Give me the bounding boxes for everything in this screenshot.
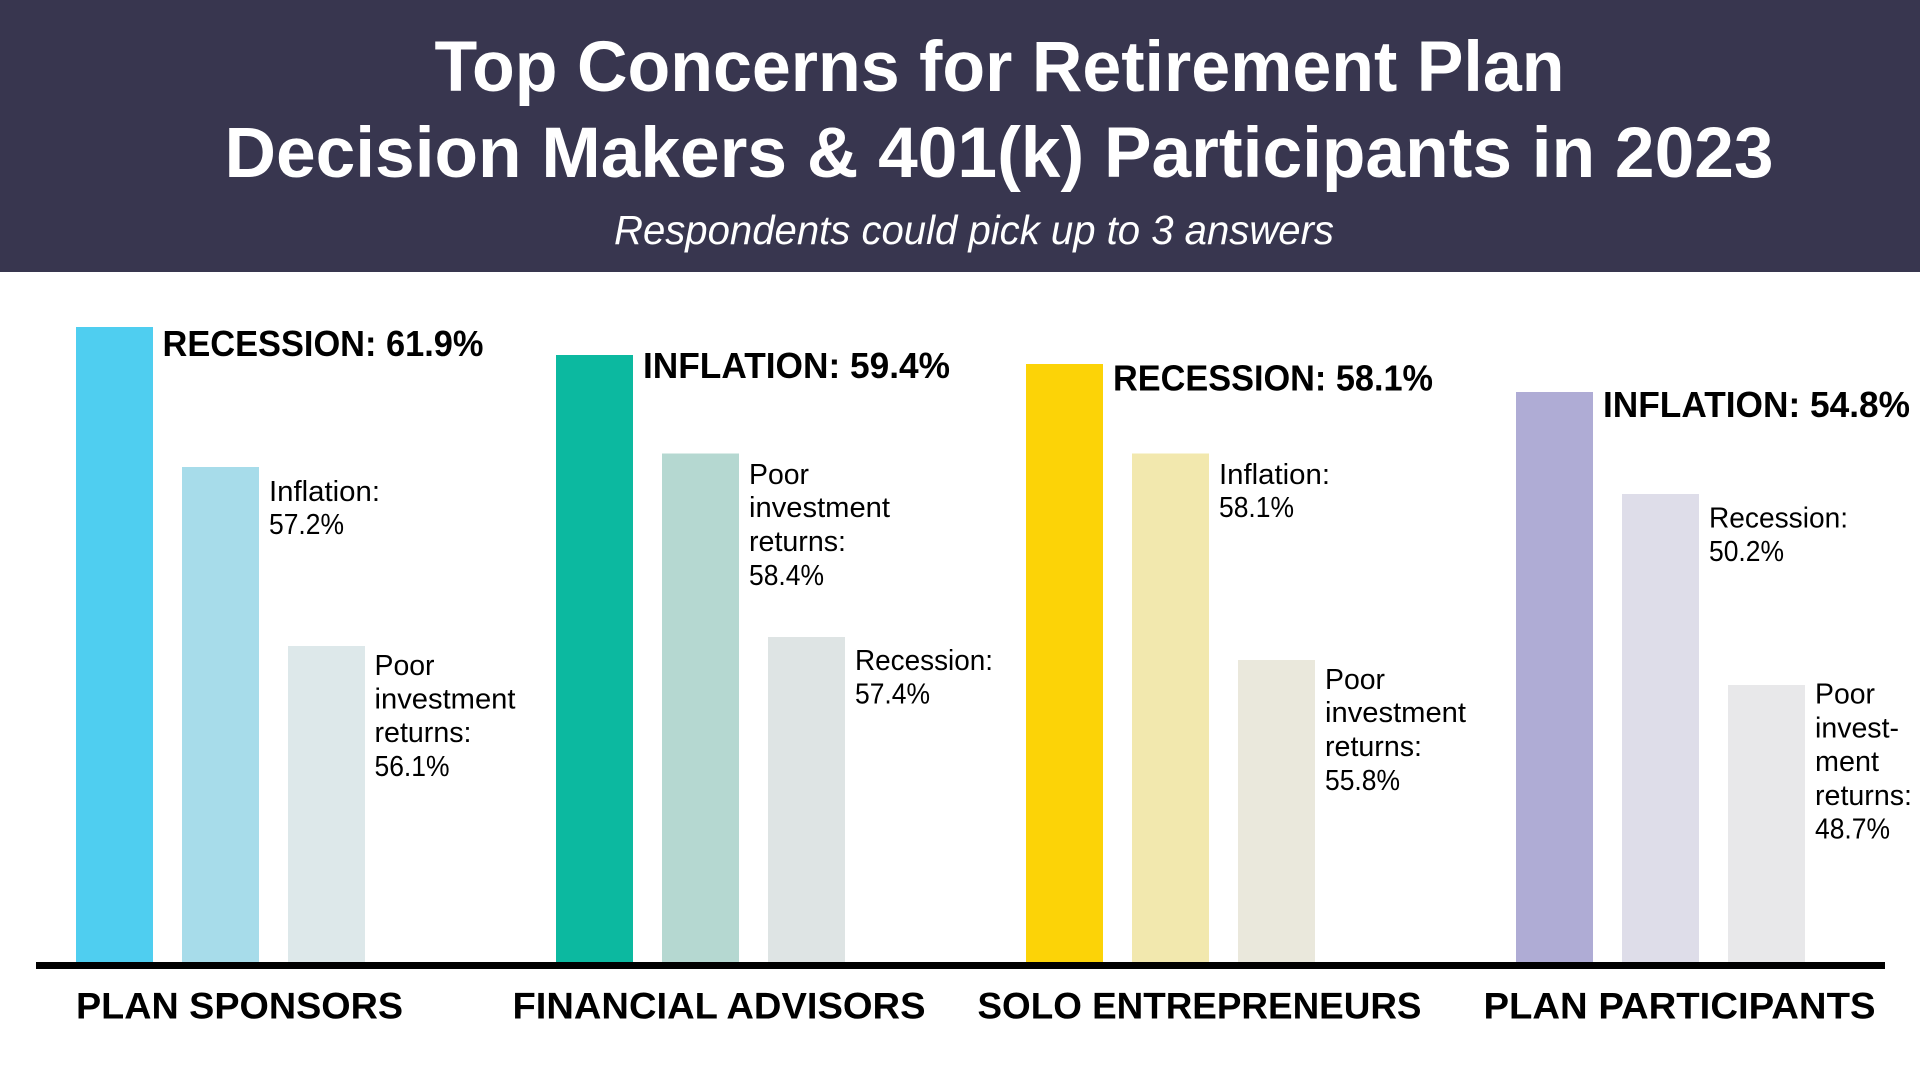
- label: poor investment returns 55.8%: 55.8%: [1325, 765, 1400, 797]
- label: poor investment returns 58.4%: 58.4%: [749, 560, 824, 592]
- bar: inflation 59.4%: [556, 355, 633, 963]
- panel: plan sponsors bars: [76, 323, 516, 963]
- label: poor investment returns 58.4%: [749, 459, 890, 592]
- title: [224, 28, 1774, 193]
- category label: solo entrepreneurs: SOLO ENTREPRENEURS: [978, 986, 1422, 1027]
- label: poor investment returns 48.7%: 48.7%: [1815, 814, 1890, 846]
- label: recession 57.4%: Recession:: [855, 645, 993, 677]
- bar: inflation 58.1%: [1132, 454, 1209, 963]
- category label: financial advisors: FINANCIAL ADVISORS: [512, 986, 926, 1027]
- subtitle: Respondents could pick up to 3 answers: [614, 207, 1334, 253]
- label: poor investment returns 56.1%: 56.1%: [374, 751, 450, 783]
- bar: recession 58.1%: [1026, 364, 1103, 963]
- bar: poor investment returns 55.8%: [1238, 660, 1315, 963]
- panel: financial advisors bars: [556, 345, 993, 963]
- label: inflation 57.2%: [269, 476, 380, 541]
- bar: poor investment returns 56.1%: [288, 646, 365, 963]
- label: recession 50.2%: 50.2%: [1709, 536, 1784, 568]
- category label: plan participants: PLAN PARTICIPANTS: [1484, 986, 1876, 1027]
- label: inflation 57.2%: 57.2%: [269, 509, 344, 541]
- label: recession 50.2%: [1709, 502, 1848, 568]
- panel: solo entrepreneurs bars: [1026, 358, 1466, 963]
- label: recession 50.2%: Recession:: [1709, 502, 1848, 534]
- label: poor investment returns 55.8%: investment: [1325, 697, 1466, 729]
- label: inflation 58.1%: [1219, 459, 1330, 524]
- chart baseline: [36, 962, 1885, 969]
- bar: recession 57.4%: [768, 637, 845, 963]
- title: Top Concerns for Retirement Plan: [434, 28, 1564, 107]
- label: poor investment returns 55.8%: Poor: [1325, 664, 1386, 696]
- label: inflation 58.1%: Inflation:: [1219, 459, 1330, 491]
- bar: recession 50.2%: [1622, 494, 1699, 963]
- label: inflation 57.2%: Inflation:: [269, 476, 380, 508]
- label: poor investment returns 58.4%: investment: [749, 492, 890, 524]
- label: poor investment returns 58.4%: returns:: [749, 526, 846, 558]
- panel: plan participants bars: [1516, 384, 1912, 963]
- label: poor investment returns 48.7%: returns:: [1815, 780, 1912, 812]
- label: poor investment returns 48.7%: ment: [1815, 746, 1879, 778]
- label: recession 57.4%: 57.4%: [855, 678, 930, 710]
- label: poor investment returns 56.1%: [374, 650, 516, 783]
- label: poor investment returns 48.7%: [1815, 679, 1912, 846]
- label: inflation 59.4%: INFLATION: 59.4%: [643, 345, 950, 386]
- label: poor investment returns 58.4%: Poor: [749, 459, 810, 491]
- bar: inflation 57.2%: [182, 467, 259, 963]
- label: poor investment returns 55.8%: returns:: [1325, 731, 1422, 763]
- label: poor investment returns 48.7%: invest-: [1815, 713, 1899, 745]
- category label: plan sponsors: PLAN SPONSORS: [76, 986, 403, 1027]
- label: poor investment returns 56.1%: investment: [374, 684, 516, 716]
- title: Decision Makers & 401(k) Participants in 2023: [224, 114, 1774, 193]
- bar: poor investment returns 58.4%: [662, 454, 739, 963]
- label: poor investment returns 56.1%: Poor: [374, 650, 435, 682]
- label: inflation 58.1%: 58.1%: [1219, 492, 1294, 524]
- header banner: [0, 0, 1920, 272]
- label: poor investment returns 55.8%: [1325, 664, 1466, 797]
- label: inflation 54.8%: INFLATION: 54.8%: [1603, 384, 1910, 425]
- label: poor investment returns 48.7%: Poor: [1815, 679, 1876, 711]
- label: recession 61.9%: RECESSION: 61.9%: [162, 323, 484, 364]
- bar: poor investment returns 48.7%: [1728, 685, 1805, 963]
- bar: inflation 54.8%: [1516, 392, 1593, 963]
- label: recession 58.1%: RECESSION: 58.1%: [1113, 358, 1433, 398]
- bar: recession 61.9%: [76, 327, 153, 963]
- label: recession 57.4%: [855, 645, 993, 710]
- label: poor investment returns 56.1%: returns:: [374, 717, 472, 749]
